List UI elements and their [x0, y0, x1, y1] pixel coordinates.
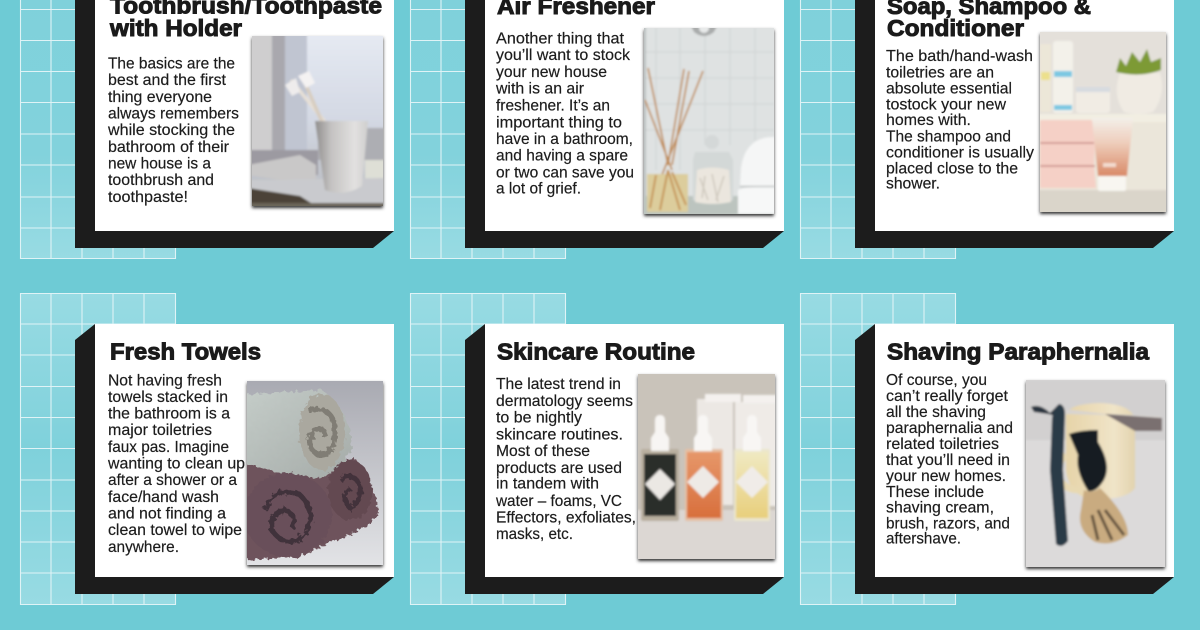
text: skincare description: The latest trend in [496, 376, 621, 393]
text: towels description: clean towel to wipe [108, 522, 242, 539]
text: toothbrush description: toothbrush and [108, 172, 214, 189]
panel: air freshener [465, 0, 784, 248]
text: shaving description: related toiletries [886, 436, 999, 453]
text: toothbrush description: The basics are the [108, 56, 235, 72]
text: air freshener description: freshener. It’s an [496, 98, 610, 114]
photo: reed diffuser and towels [640, 23, 778, 218]
photo: rolled towels [240, 381, 383, 567]
text: toothbrush description: while stocking the [107, 122, 235, 139]
panel: skincare routine [465, 324, 784, 594]
text: skincare description: Most of these [496, 443, 590, 460]
panel: fresh towels [75, 324, 394, 594]
text: shaving description: Of course, you [886, 372, 987, 389]
text: towels description: major toiletries [108, 422, 212, 439]
text: air freshener description: Another thing that [496, 30, 625, 48]
text: towels description: towels stacked in [108, 389, 228, 406]
text: air freshener description: and having a spare [496, 148, 628, 164]
text: air freshener description: you’ll want to stock [496, 47, 630, 64]
heading: soap, shampoo and conditioner: Conditioner [887, 15, 1024, 41]
text: shaving description: that you’ll need in [886, 452, 1010, 469]
text: skincare description: to be nightly [496, 410, 582, 426]
text: towels description: face/hand wash [108, 489, 219, 506]
heading: toothbrush: with Holder [109, 15, 242, 41]
heading: skincare routine: Skincare Routine [497, 338, 695, 364]
panel: shaving paraphernalia [855, 324, 1174, 594]
text: towels description: faux pas. Imagine [108, 439, 229, 456]
text: soap description: placed close to the [886, 160, 1018, 178]
text: toothbrush description: best and the first [108, 72, 227, 89]
text: skincare description: dermatology seems [496, 393, 633, 410]
text: shaving description: aftershave. [886, 530, 961, 548]
photo: toothbrushes in cup [248, 32, 387, 210]
text: skincare description: products are used [496, 460, 622, 477]
text: toothbrush description: always remembers [108, 106, 239, 122]
text: soap description: The bath/hand-wash [886, 48, 1033, 65]
text: soap description: tostock your new [886, 96, 1007, 114]
text: soap description: conditioner is usually [886, 144, 1034, 162]
text: soap description: The shampoo and [886, 128, 1011, 146]
text: air freshener description: have in a bathroom, [496, 131, 633, 148]
text: air freshener description: important thing to [496, 114, 622, 132]
text: shaving description: brush, razors, and [886, 516, 1010, 532]
grid panel: top left [20, 0, 176, 259]
text: shaving description: These include [886, 484, 984, 501]
text: soap description: shower. [886, 176, 940, 192]
text: soap description: absolute essential [886, 80, 1012, 98]
text: towels description: after a shower or a [108, 472, 237, 489]
heading: shaving paraphernalia: Shaving Paraphernalia [887, 338, 1150, 364]
grid panel: bottom middle [410, 293, 566, 605]
grid panel: top right [800, 0, 956, 259]
text: towels description: anywhere. [108, 539, 179, 556]
text: air freshener description: your new house [496, 64, 607, 81]
panel: toothbrush and toothpaste [75, 0, 394, 248]
text: soap description: homes with. [886, 112, 971, 129]
text: toothbrush description: thing everyone [108, 89, 212, 106]
heading: fresh towels: Fresh Towels [110, 338, 261, 364]
text: towels description: Not having fresh [108, 372, 222, 390]
grid panel: bottom left [20, 293, 176, 605]
text: skincare description: masks, etc. [496, 526, 573, 543]
text: skincare description: water – foams, VC [495, 493, 622, 510]
grid panel: top middle [410, 0, 566, 259]
text: shaving description: paraphernalia and [886, 420, 1013, 437]
text: toothbrush description: new house is a [108, 156, 211, 172]
text: shaving description: your new homes. [886, 468, 1006, 485]
text: towels description: wanting to clean up [107, 456, 245, 472]
text: towels description: and not finding a [108, 506, 226, 522]
text: air freshener description: with is an air [495, 80, 584, 98]
text: shaving description: shaving cream, [886, 500, 994, 516]
text: towels description: the bathroom is a [108, 406, 230, 422]
panel: soap, shampoo and conditioner [855, 0, 1174, 248]
photo: serum bottles [634, 370, 779, 563]
text: shaving description: can’t really forget [886, 388, 1009, 405]
text: soap description: toiletries are an [886, 64, 994, 82]
text: skincare description: in tandem with [496, 476, 599, 492]
photo: razor and shaving brush [1022, 376, 1169, 571]
text: toothbrush description: bathroom of their [108, 139, 229, 156]
text: skincare description: Effectors, exfoliates, [496, 510, 636, 526]
text: toothbrush description: toothpaste! [108, 189, 188, 206]
text: shaving description: all the shaving [886, 404, 986, 421]
text: skincare description: skincare routines. [496, 426, 623, 444]
photo: toiletries on shelf [1036, 28, 1170, 216]
text: air freshener description: or two can save you [496, 164, 634, 182]
grid panel: bottom right [800, 293, 956, 605]
text: air freshener description: a lot of grief. [496, 180, 581, 198]
